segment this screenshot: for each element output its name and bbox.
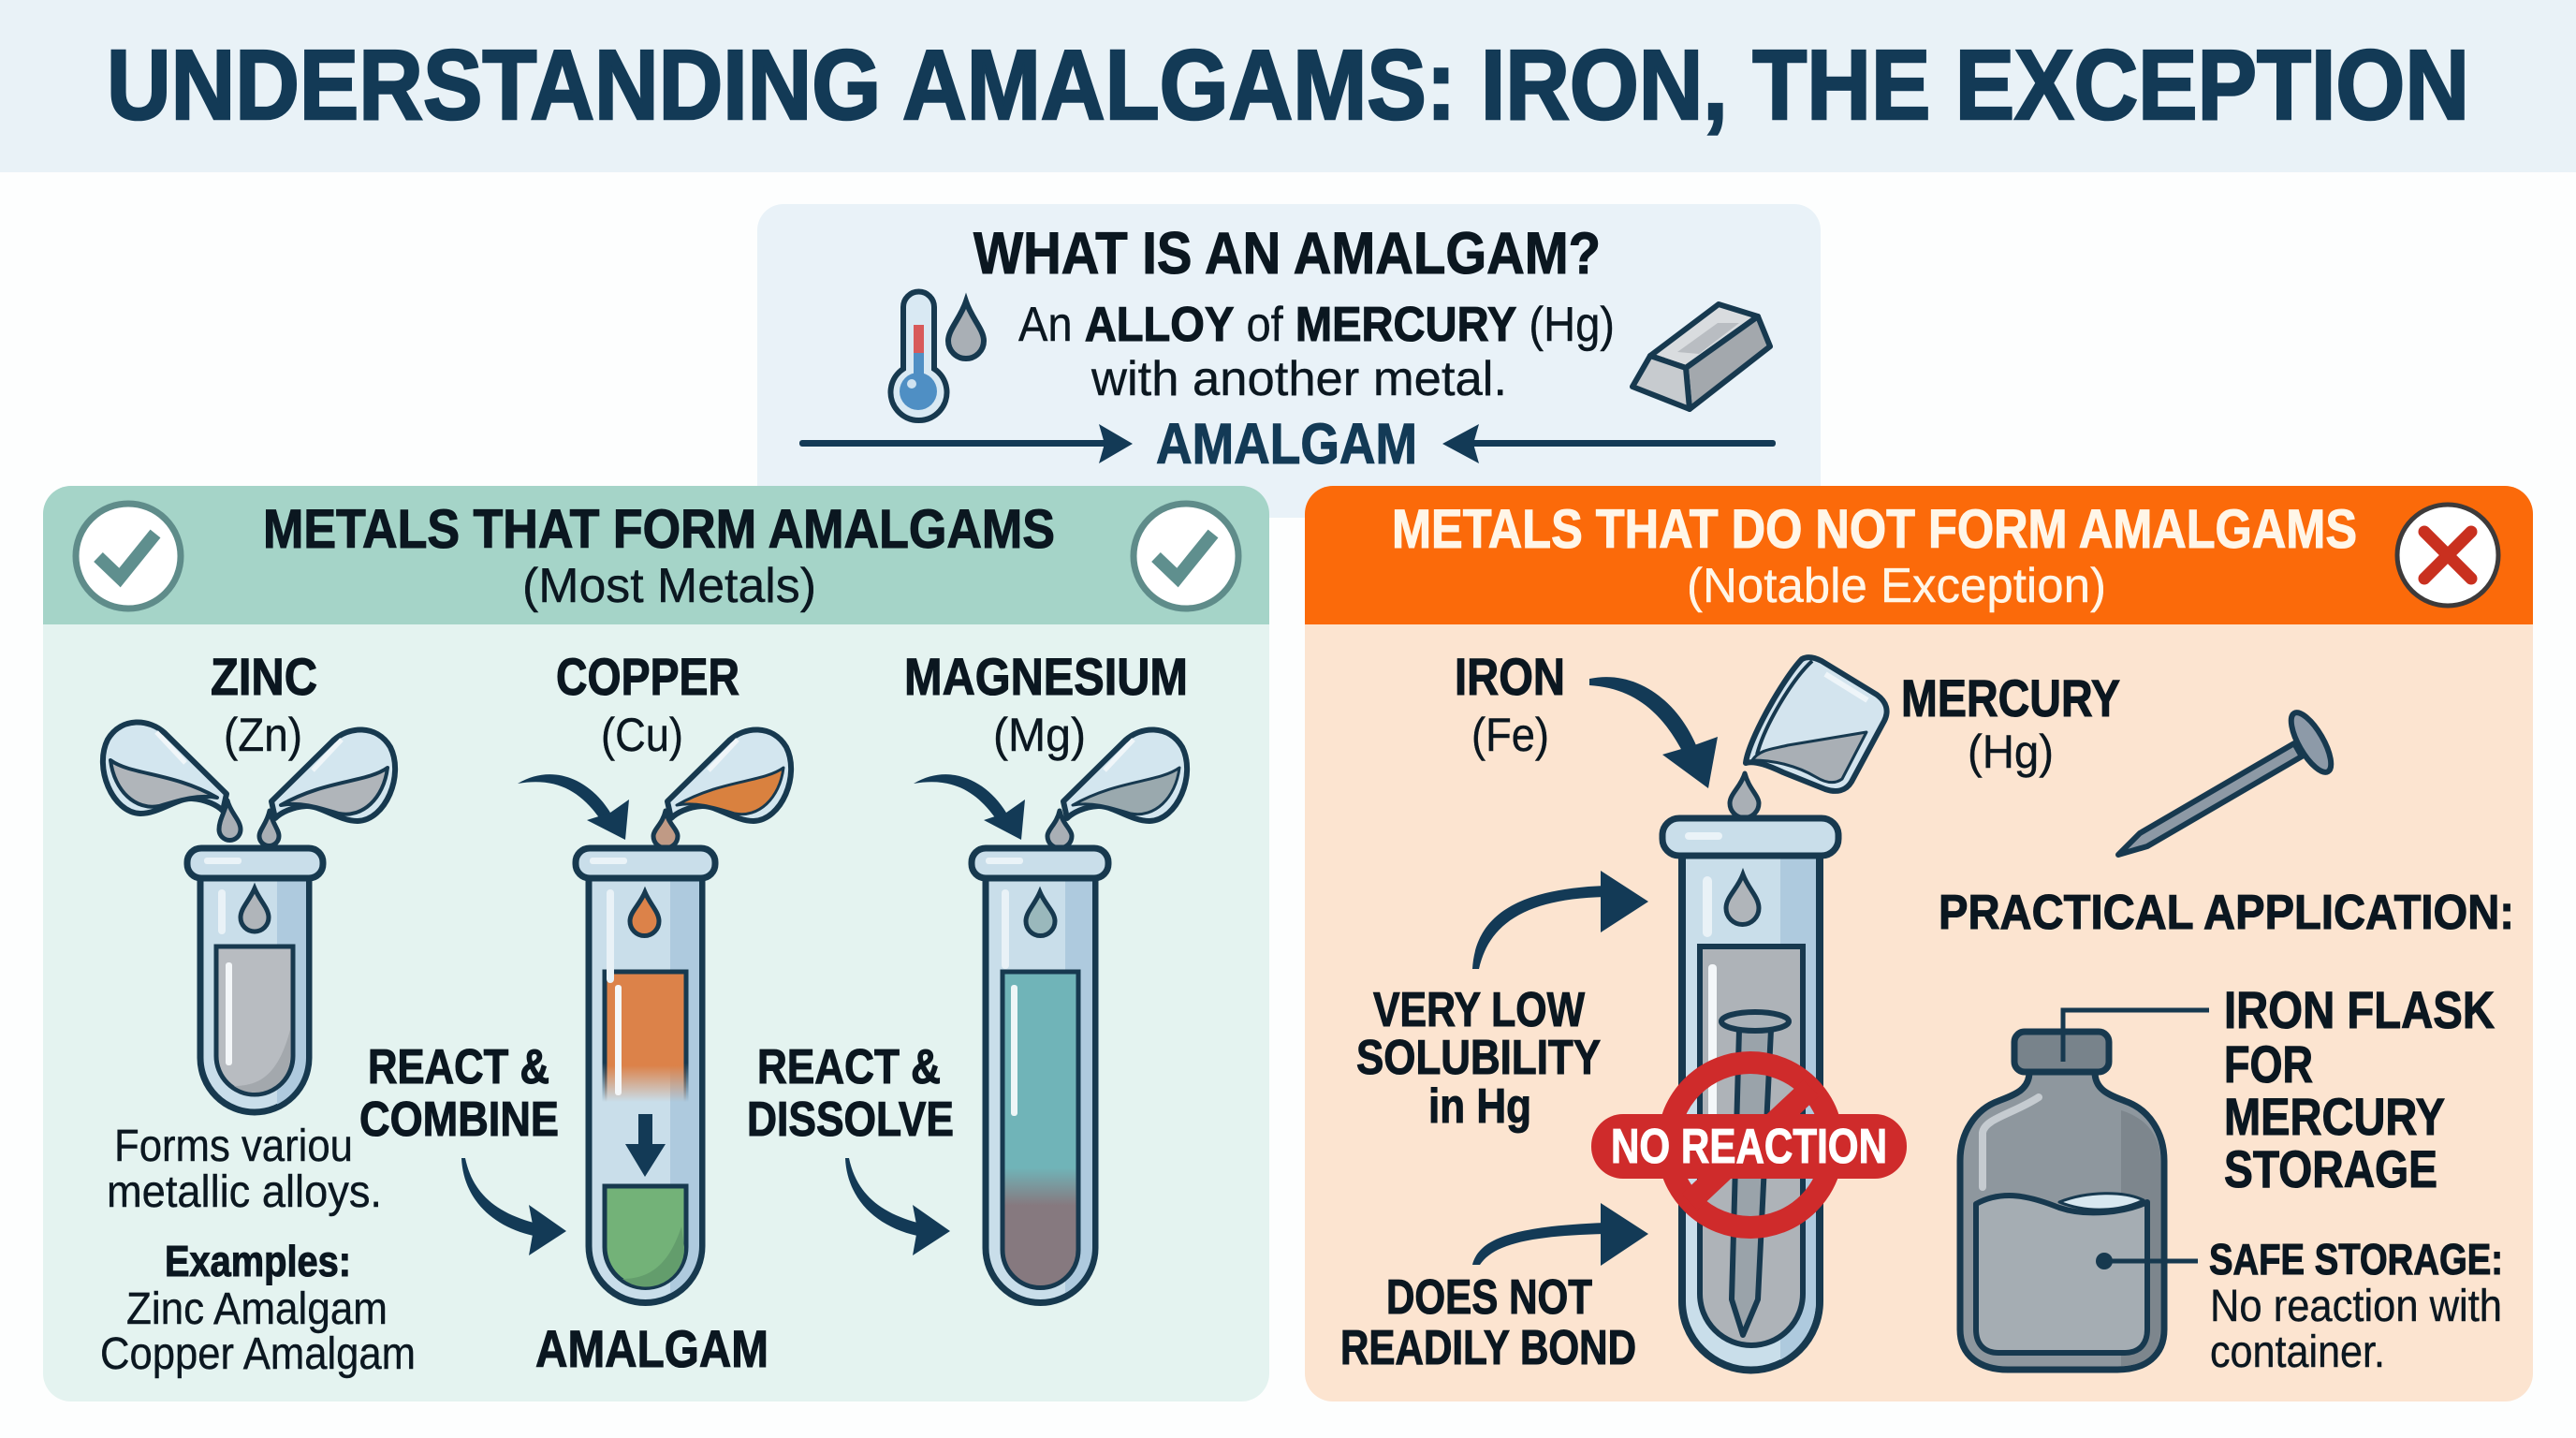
text: zinc forms alloys: Forms variou [114,1122,353,1171]
copper label: (Cu) [601,709,683,761]
icon: zinc right flask [259,729,395,846]
no reaction badge [1591,1063,1907,1227]
icon: metal ingot [1632,304,1770,409]
arrow: left to amalgam [799,424,1133,463]
panel header: green: (Most Metals) [522,559,816,613]
safe storage text [2209,1235,2503,1377]
react and dissolve label: DISSOLVE [747,1093,954,1147]
test tube: copper [576,848,715,1302]
iron flask label: MERCURY [2224,1087,2445,1146]
does not readily bond label: READILY BOND [1340,1321,1636,1375]
text: examples: Examples: [165,1237,351,1285]
zinc label [211,647,317,761]
copper amalgam label: AMALGAM [535,1319,768,1378]
icon: copper flask [653,729,791,848]
text: zinc forms alloys [107,1122,382,1217]
iron label [1455,647,1565,761]
icon: mercury beaker [1730,657,1887,817]
safe storage text: No reaction with [2210,1282,2502,1331]
arrow: does not bond [1472,1203,1648,1266]
copper label [556,647,739,761]
test tube: magnesium [972,848,1108,1303]
text: examples: Zinc Amalgam [126,1284,388,1334]
iron flask label [2224,980,2495,1198]
arrow: down inside copper tube [625,1114,666,1177]
safe storage text: container. [2210,1328,2385,1377]
react and combine label: REACT & [368,1040,549,1094]
very low solubility label: VERY LOW [1373,983,1586,1037]
react and dissolve label: REACT & [757,1040,941,1094]
panel header: green: METALS THAT FORM AMALGAMS [263,499,1055,560]
iron label: (Fe) [1471,709,1549,761]
arrow: into copper tube [518,774,629,840]
leader line: flask cap [2063,1010,2209,1062]
very low solubility label: in Hg [1428,1079,1531,1134]
icon: nail in tube [1721,1012,1789,1335]
does not readily bond label [1340,1270,1636,1375]
text: examples: Copper Amalgam [100,1329,416,1379]
react and dissolve label [747,1040,954,1147]
no reaction badge: NO REACTION [1611,1120,1887,1174]
very low solubility label [1356,983,1601,1134]
arrow: dissolve to tube [845,1158,950,1255]
test tube: iron with nail [1662,818,1838,1371]
panel: what is an amalgam [757,204,1821,518]
iron flask label: IRON FLASK [2224,980,2495,1039]
arrow: solubility [1472,871,1648,969]
title banner [0,0,2576,172]
icon: right check badge [1134,504,1238,609]
mercury label [1901,668,2120,778]
icon: red x badge [2397,505,2498,606]
react and combine label [359,1040,559,1147]
iron flask label: STORAGE [2224,1139,2437,1198]
magnesium label: MAGNESIUM [904,647,1188,706]
icon: iron nail [2118,707,2338,855]
definition text [1018,298,1615,406]
mercury label: MERCURY [1901,668,2120,727]
panel: metals that form amalgams [43,486,1269,1401]
test tube: zinc [187,848,323,1112]
zinc label: ZINC [211,647,317,706]
icon: mercury drop [948,301,984,359]
does not readily bond label: DOES NOT [1386,1270,1592,1325]
mercury label: (Hg) [1968,726,2054,778]
panel header: orange [1305,486,2533,624]
leader line: safe storage [2096,1253,2198,1269]
amalgam label: AMALGAM [1156,412,1417,476]
panel header: orange: METALS THAT DO NOT FORM AMALGAMS [1392,499,2357,560]
panel header: orange: (Notable Exception) [1687,559,2106,613]
icon: zinc left flask [103,722,241,841]
safe storage text: SAFE STORAGE: [2209,1235,2503,1284]
icon: left check badge [76,504,181,609]
icon: iron flask [1960,1032,2164,1370]
arrow: iron into tube [1589,677,1718,788]
heading: what is an amalgam: WHAT IS AN AMALGAM? [973,221,1601,286]
arrow: combine to amalgam [461,1158,566,1255]
panel header: green [43,486,1269,624]
text: zinc forms alloys: metallic alloys. [107,1167,382,1217]
heading: practical application: PRACTICAL APPLICATION: [1939,886,2514,940]
magnesium label: (Mg) [993,709,1086,761]
zinc label: (Zn) [224,709,302,761]
definition text: with another metal. [1090,352,1507,406]
panel: metals that do not form amalgams [1305,486,2533,1401]
arrow: into magnesium tube [914,774,1025,840]
icon: magnesium flask [1047,729,1187,848]
text: examples [100,1237,416,1379]
icon: thermometer [891,292,947,420]
iron label: IRON [1455,647,1565,706]
iron flask label: FOR [2224,1034,2313,1093]
copper label: COPPER [556,647,739,706]
react and combine label: COMBINE [359,1093,559,1147]
very low solubility label: SOLUBILITY [1356,1031,1601,1085]
definition text: An ALLOY of MERCURY (Hg) [1018,298,1615,352]
magnesium label [904,647,1188,761]
arrow: right to amalgam [1442,424,1776,463]
